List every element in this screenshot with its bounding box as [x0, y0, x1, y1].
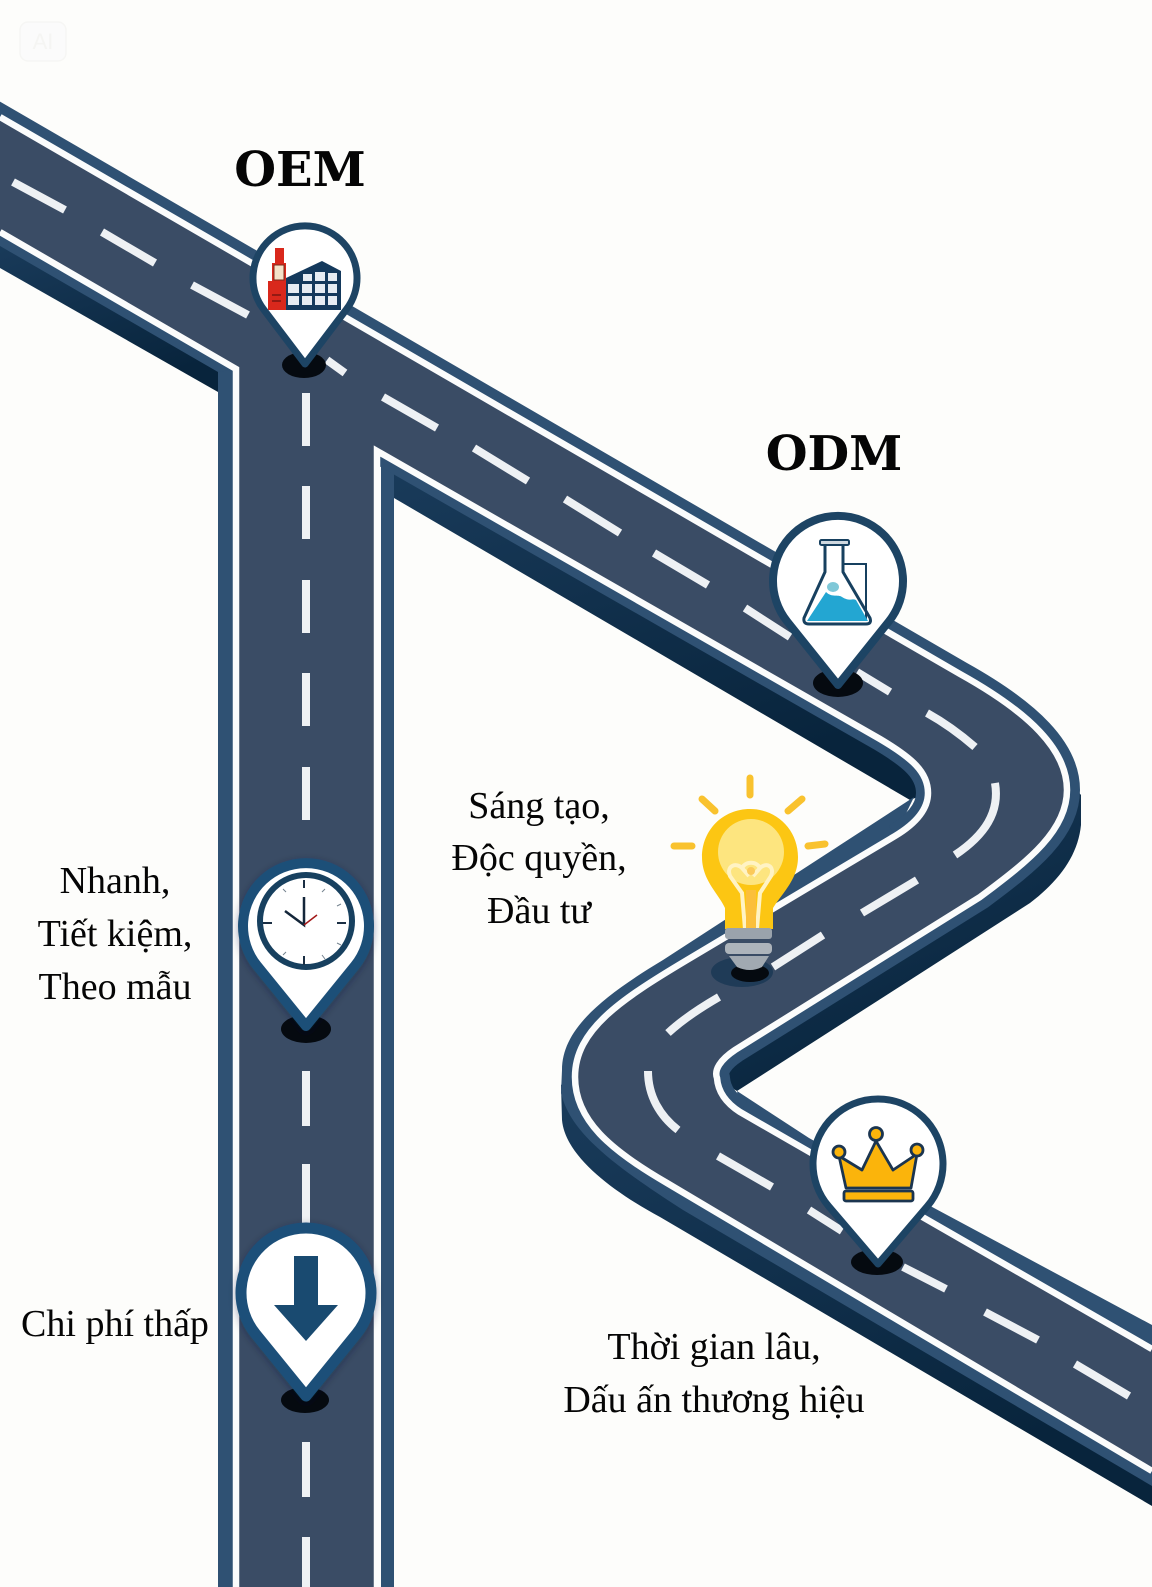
- text: ODM benefits: Đầu tư: [487, 890, 592, 932]
- icon: flask: [804, 540, 870, 624]
- text: ODM trade-offs: Thời gian lâu,: [607, 1326, 821, 1368]
- pin: clock: [243, 863, 369, 1043]
- pin: factory: [253, 226, 357, 378]
- heading: OEM: OEM: [234, 142, 366, 198]
- text: ODM benefits: Độc quyền,: [451, 837, 627, 879]
- text: OEM benefits: Tiết kiệm,: [38, 913, 192, 955]
- icon: clock face: [260, 875, 352, 967]
- lightbulb: [674, 778, 825, 987]
- icon: arrow: [274, 1256, 338, 1341]
- text: ODM benefits: Sáng tạo,: [468, 785, 610, 827]
- pin: down arrow: [241, 1228, 371, 1413]
- icon: crown: [833, 1128, 923, 1201]
- icon: bulb glass: [702, 809, 798, 929]
- text: OEM benefits: Nhanh,: [60, 860, 170, 902]
- text: ODM trade-offs: Dấu ấn thương hiệu: [563, 1379, 865, 1421]
- watermark badge: [20, 22, 66, 61]
- pin: flask: [773, 516, 903, 697]
- watermark badge: AI: [33, 29, 53, 54]
- heading: ODM: ODM: [766, 426, 902, 482]
- text: low cost: Chi phí thấp: [21, 1303, 209, 1345]
- icon: rays: [674, 778, 825, 846]
- pin: crown: [813, 1099, 943, 1275]
- text: OEM benefits: Theo mẫu: [38, 966, 192, 1008]
- icon: bulb base: [725, 928, 772, 970]
- icon: factory: [268, 248, 341, 310]
